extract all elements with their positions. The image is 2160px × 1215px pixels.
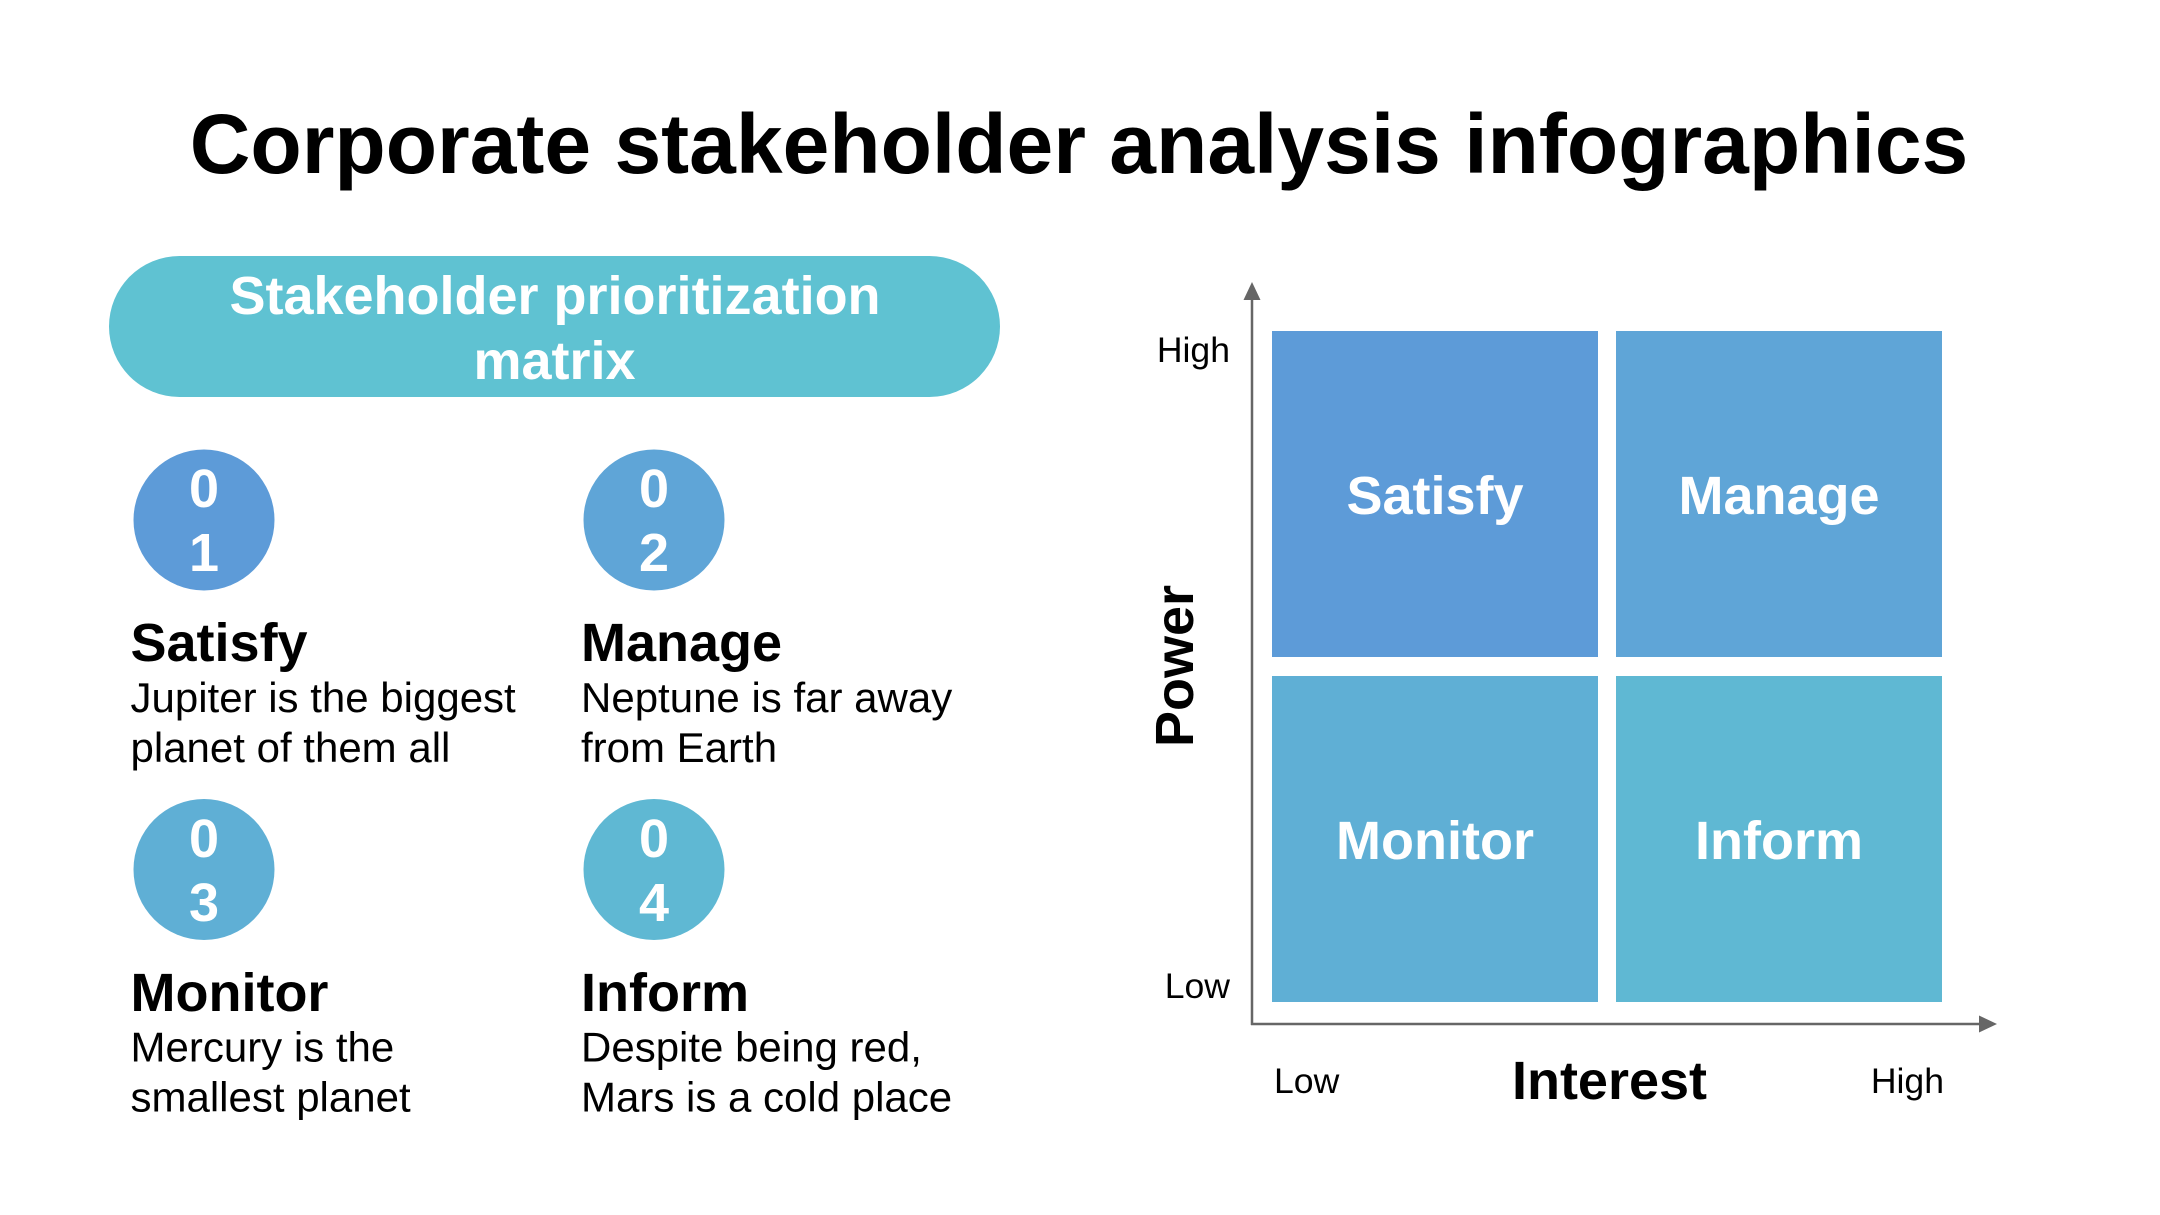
panel: item 04 Inform: 0 — [639, 809, 669, 869]
panel: item 01 Satisfy: 1 — [189, 523, 219, 583]
panel: matrix heading pill — [109, 256, 1000, 397]
title: Corporate stakeholder analysis infographics — [190, 97, 1968, 191]
panel: item 01 Satisfy: Jupiter is the biggest — [130, 674, 516, 721]
quadrant: Inform — [1616, 676, 1942, 1002]
axis label: Interest: Interest — [1512, 1051, 1707, 1111]
quadrant: Satisfy — [1272, 331, 1598, 657]
label: power low: Low — [1165, 966, 1230, 1006]
chart: power-interest matrix — [1145, 282, 1997, 1111]
panel: item 02 Manage — [581, 450, 952, 771]
quadrant: Inform: Inform — [1695, 811, 1863, 871]
panel: item 01 Satisfy — [130, 450, 516, 771]
label: power high: High — [1157, 330, 1230, 370]
label: interest high: High — [1871, 1061, 1944, 1101]
quadrant: Manage: Manage — [1678, 466, 1880, 526]
panel: matrix heading pill: matrix — [473, 331, 636, 391]
panel: item 04 Inform — [581, 799, 952, 1120]
quadrant: Manage — [1616, 331, 1942, 657]
panel: item 02 Manage: 2 — [639, 523, 669, 583]
panel: item 04 Inform: 4 — [639, 873, 669, 933]
quadrant: Monitor: Monitor — [1336, 811, 1534, 871]
panel: item 03 Monitor: 0 — [189, 809, 219, 869]
arrow: power axis — [1244, 282, 1260, 1025]
panel: item 03 Monitor: 3 — [189, 873, 219, 933]
panel: item 03 Monitor: Monitor — [130, 963, 328, 1023]
arrow: interest axis — [1251, 1016, 1997, 1032]
axis label: Power: Power — [1145, 585, 1205, 747]
panel: matrix heading pill: Stakeholder prioritization — [229, 266, 881, 326]
panel: item 02 Manage: from Earth — [581, 724, 777, 771]
panel: item 01 Satisfy: Satisfy — [130, 613, 308, 673]
panel: item 01 Satisfy: 0 — [189, 459, 219, 519]
panel: item 03 Monitor: Mercury is the — [130, 1024, 394, 1070]
panel: item 01 Satisfy: planet of them all — [130, 724, 450, 771]
panel: item 02 Manage: 0 — [639, 459, 669, 519]
quadrant: Satisfy: Satisfy — [1346, 466, 1524, 526]
quadrant: Monitor — [1272, 676, 1598, 1002]
panel: item 04 Inform: Inform — [581, 963, 749, 1023]
panel: item 03 Monitor — [130, 799, 411, 1120]
panel: item 04 Inform: Mars is a cold place — [581, 1074, 952, 1120]
panel: item 02 Manage: Neptune is far away — [581, 674, 952, 721]
panel: item 02 Manage: Manage — [581, 613, 782, 673]
label: interest low: Low — [1274, 1061, 1340, 1101]
panel: item 03 Monitor: smallest planet — [130, 1074, 411, 1120]
panel: item 04 Inform: Despite being red, — [581, 1024, 922, 1070]
